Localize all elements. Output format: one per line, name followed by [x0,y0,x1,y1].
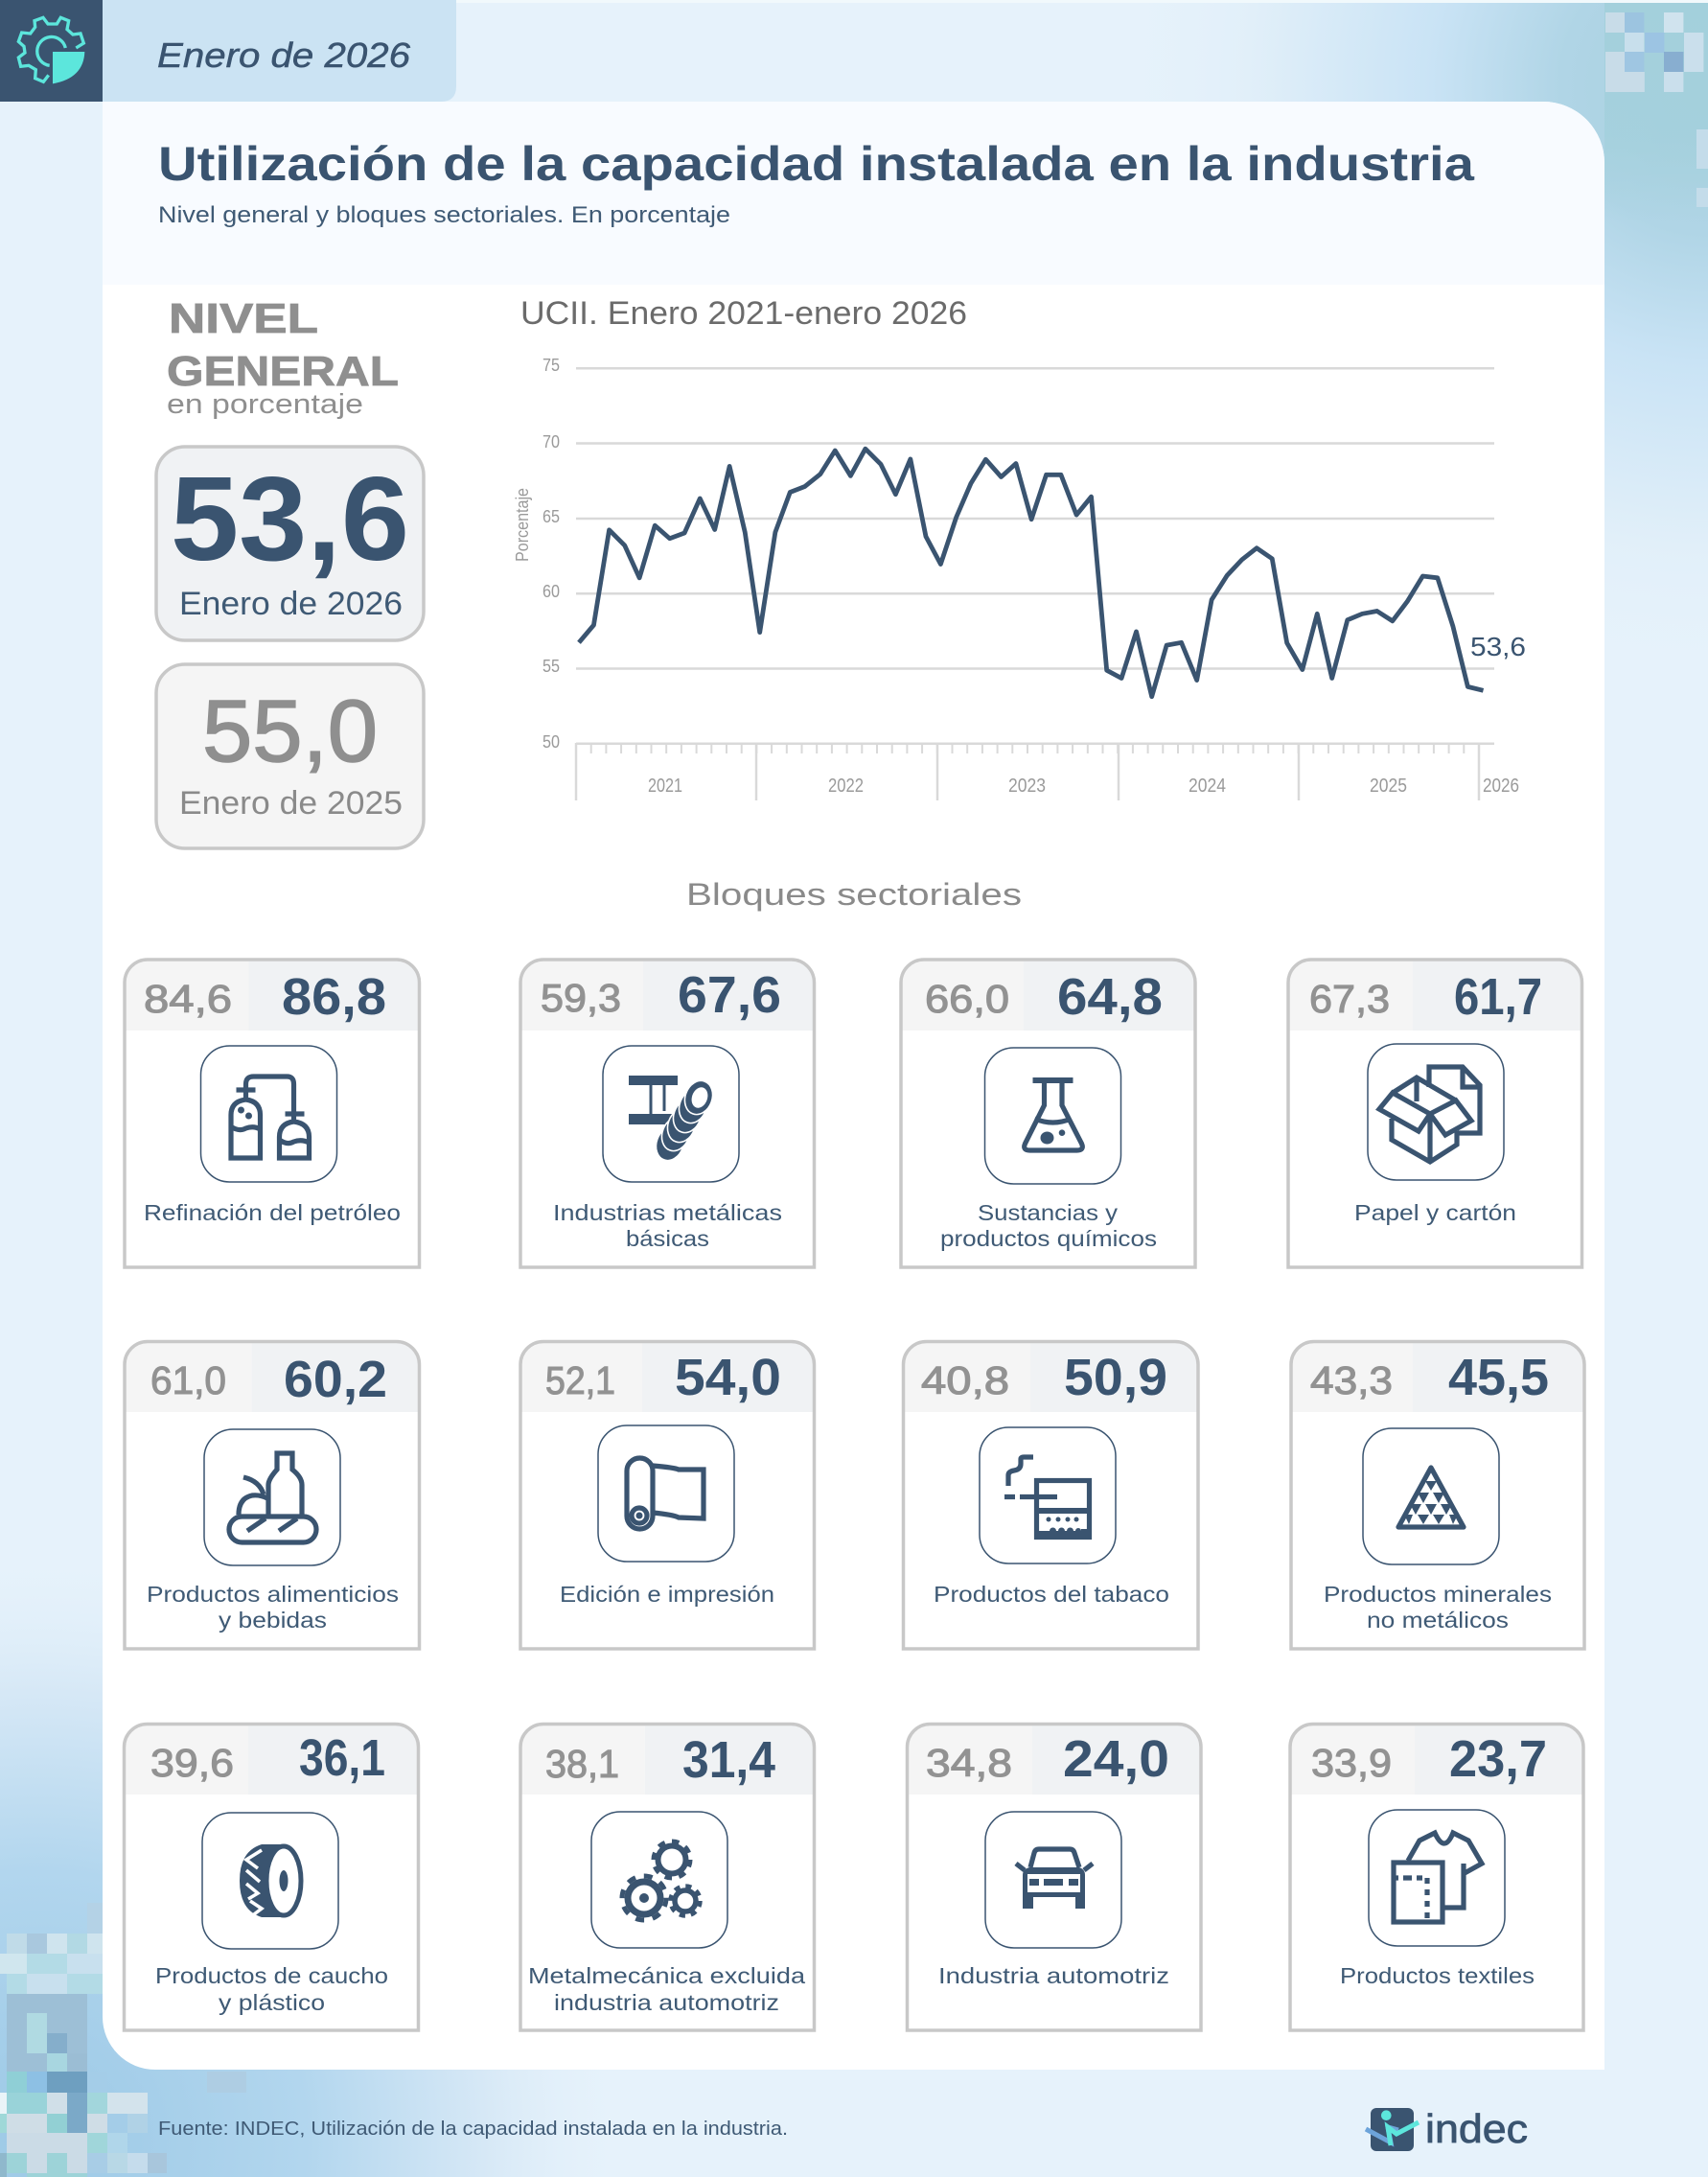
y axis labels: 75 [542,356,560,375]
label [528,1963,805,2015]
previous value: 52,1 [545,1358,615,1402]
heading: nivel general: NIVEL [169,295,318,342]
logo: indec: indec [1425,2106,1528,2151]
title: Utilización de la capacidad instalada en la industria [158,137,1475,191]
card: previous year value: 55,0 [202,683,378,780]
label: Productos textiles [1340,1963,1535,1988]
label: Metalmecánica excluida [528,1963,805,1988]
card: current value: 53,6 [171,453,409,586]
previous value: 33,9 [1311,1741,1392,1785]
icon: gas cylinders [201,1046,337,1182]
label: básicas [626,1226,709,1251]
card: Sustancias y productos químicos [901,960,1195,1267]
mosaic bottom left [0,1903,246,2177]
icon: gear badge [0,0,103,102]
label: Productos minerales [1324,1582,1552,1607]
card: Edición e impresión [520,1342,815,1649]
label [1324,1582,1552,1633]
card: Productos del tabaco [903,1342,1198,1649]
y axis labels: 55 [542,657,560,676]
heading: nivel general: en porcentaje [167,389,363,420]
y axis labels: 65 [542,507,560,526]
card: previous year value [156,664,424,848]
card: Industria automotriz [907,1724,1201,2030]
subtitle: Nivel general y bloques sectoriales. En porcentaje [158,202,730,228]
previous value: 38,1 [545,1742,619,1786]
date tab [103,0,456,102]
previous value: 40,8 [921,1358,1009,1402]
icon: tire [202,1813,338,1949]
label: industria automotriz [554,1990,779,2015]
current value: 86,8 [282,968,386,1026]
current value: 45,5 [1448,1349,1549,1406]
card: Papel y cartón [1288,960,1581,1267]
previous value: 66,0 [925,977,1009,1021]
x axis labels: 2023 [1008,776,1046,797]
icon: mineral pile [1363,1428,1499,1564]
chart title: UCII. Enero 2021-enero 2026 [520,295,967,332]
current value: 54,0 [675,1349,781,1406]
x axis labels: 2025 [1370,776,1407,797]
label: productos químicos [940,1226,1157,1251]
label [940,1200,1157,1251]
current value: 61,7 [1454,968,1542,1026]
x axis labels: 2022 [828,776,864,797]
current value: 31,4 [682,1731,775,1789]
y axis title: Porcentaje [513,488,532,562]
label: Productos del tabaco [934,1582,1169,1607]
label: Productos de caucho [155,1963,388,1988]
heading: nivel general [167,295,399,420]
line chart [513,356,1526,800]
icon: food and bottle [204,1429,340,1565]
icon: gears [591,1812,727,1948]
previous value: 61,0 [150,1358,226,1402]
current value: 67,6 [678,966,781,1024]
heading: nivel general: GENERAL [167,348,399,395]
previous value: 39,6 [150,1741,234,1785]
label: Productos alimenticios [147,1582,399,1607]
gridlines [576,368,1494,800]
icon: steel beam and bars [603,1046,739,1182]
label: Sustancias y [978,1200,1119,1225]
main panel [103,102,1604,2070]
label: Papel y cartón [1354,1200,1516,1225]
previous value: 43,3 [1310,1358,1393,1402]
label [155,1963,388,2015]
current value: 60,2 [284,1351,387,1408]
card: previous year value: Enero de 2025 [179,785,403,822]
icon: shirt and fabric [1369,1810,1505,1946]
card: Productos textiles [1290,1724,1583,2030]
date tab label: Enero de 2026 [157,35,411,75]
card: Industrias metálicas básicas [520,960,815,1267]
card: Productos minerales no metálicos [1291,1342,1584,1649]
mosaic top right [1605,12,1708,207]
label: Industrias metálicas [553,1200,782,1225]
card: current value [156,447,424,640]
card: Metalmecánica excluida industria automotriz [520,1724,815,2030]
card: current value: Enero de 2026 [179,586,403,622]
label [147,1582,399,1633]
previous value: 34,8 [926,1741,1012,1785]
card: Productos de caucho y plástico [125,1724,418,2030]
x axis labels: 2021 [648,776,682,797]
icon: paper roll [598,1425,734,1562]
current value: 64,8 [1057,968,1163,1026]
card: Refinación del petróleo [125,960,420,1267]
end value label: 53,6 [1470,632,1526,661]
x axis labels [648,776,1519,797]
current value: 24,0 [1063,1730,1169,1788]
previous value: 59,3 [541,976,621,1020]
icon: box and paper [1368,1044,1504,1180]
label [553,1200,782,1251]
label: Refinación del petróleo [144,1200,401,1225]
previous value: 67,3 [1309,977,1390,1021]
icon: flask [985,1048,1121,1184]
icon: car [985,1812,1121,1948]
section heading: Bloques sectoriales [686,877,1022,912]
current value: 50,9 [1064,1349,1167,1406]
logo: indec [1366,2106,1528,2151]
y axis labels: 50 [542,732,560,752]
data line [579,449,1484,697]
current value: 23,7 [1449,1730,1547,1788]
x axis labels: 2026 [1483,776,1519,797]
y axis labels [542,356,560,752]
label: Edición e impresión [560,1582,774,1607]
current value: 36,1 [299,1729,385,1787]
x axis labels: 2024 [1189,776,1226,797]
header band [103,102,1604,285]
card: Productos alimenticios y bebidas [125,1342,420,1649]
label: no metálicos [1367,1608,1509,1633]
label: Industria automotriz [938,1963,1169,1988]
label: y plástico [219,1990,325,2015]
y axis labels: 60 [542,582,560,601]
source note: Fuente: INDEC, Utilización de la capacidad instalada en la industria. [158,2118,788,2140]
icon: cigarette and pack [980,1427,1116,1563]
previous value: 84,6 [144,977,232,1021]
y axis labels: 70 [542,432,560,452]
label: y bebidas [219,1608,327,1633]
